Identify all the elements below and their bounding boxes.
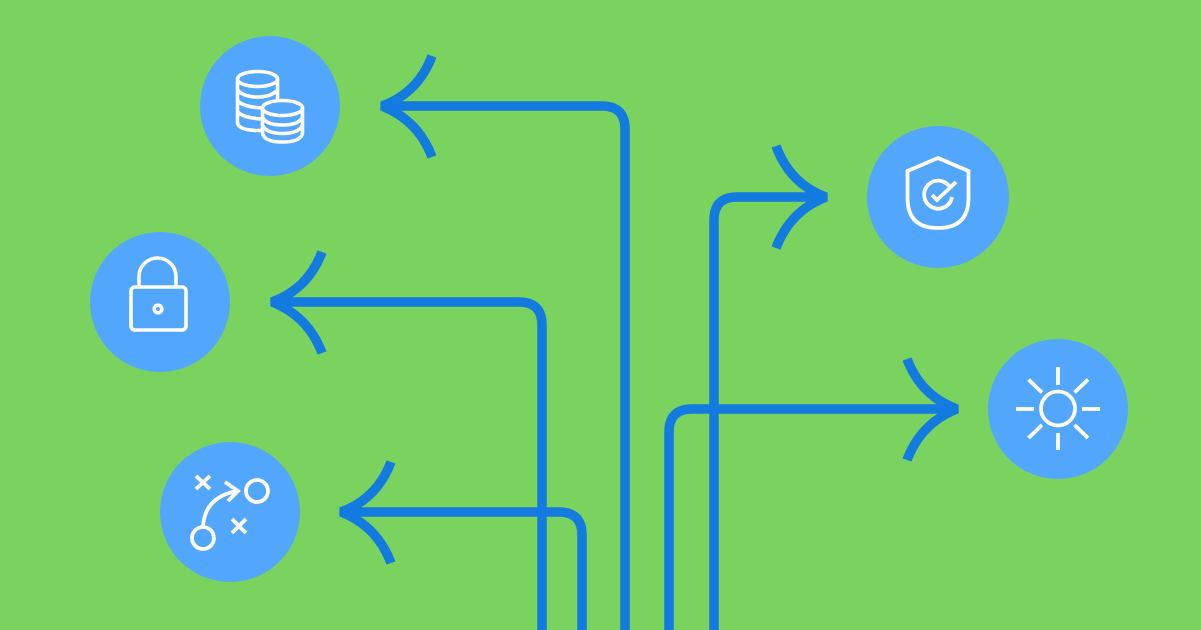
arrow: to strategy [341, 462, 582, 630]
icon: sun [1016, 367, 1100, 450]
icon: coin stacks [238, 72, 302, 142]
icon badge: sun [988, 339, 1128, 479]
icon: padlock [131, 258, 186, 330]
icon badge: coins [200, 36, 340, 176]
arrow: to coins [382, 56, 625, 630]
icon badge: lock [90, 232, 230, 372]
icon badge: strategy [160, 442, 300, 582]
arrows [272, 56, 957, 630]
icon: shield with check [908, 158, 968, 228]
arrow: to lock [272, 252, 542, 630]
arrow: to shield [714, 146, 826, 630]
icon badge: shield [867, 126, 1009, 268]
icon: play diagram [192, 476, 268, 549]
arrow: to sun [669, 359, 957, 630]
